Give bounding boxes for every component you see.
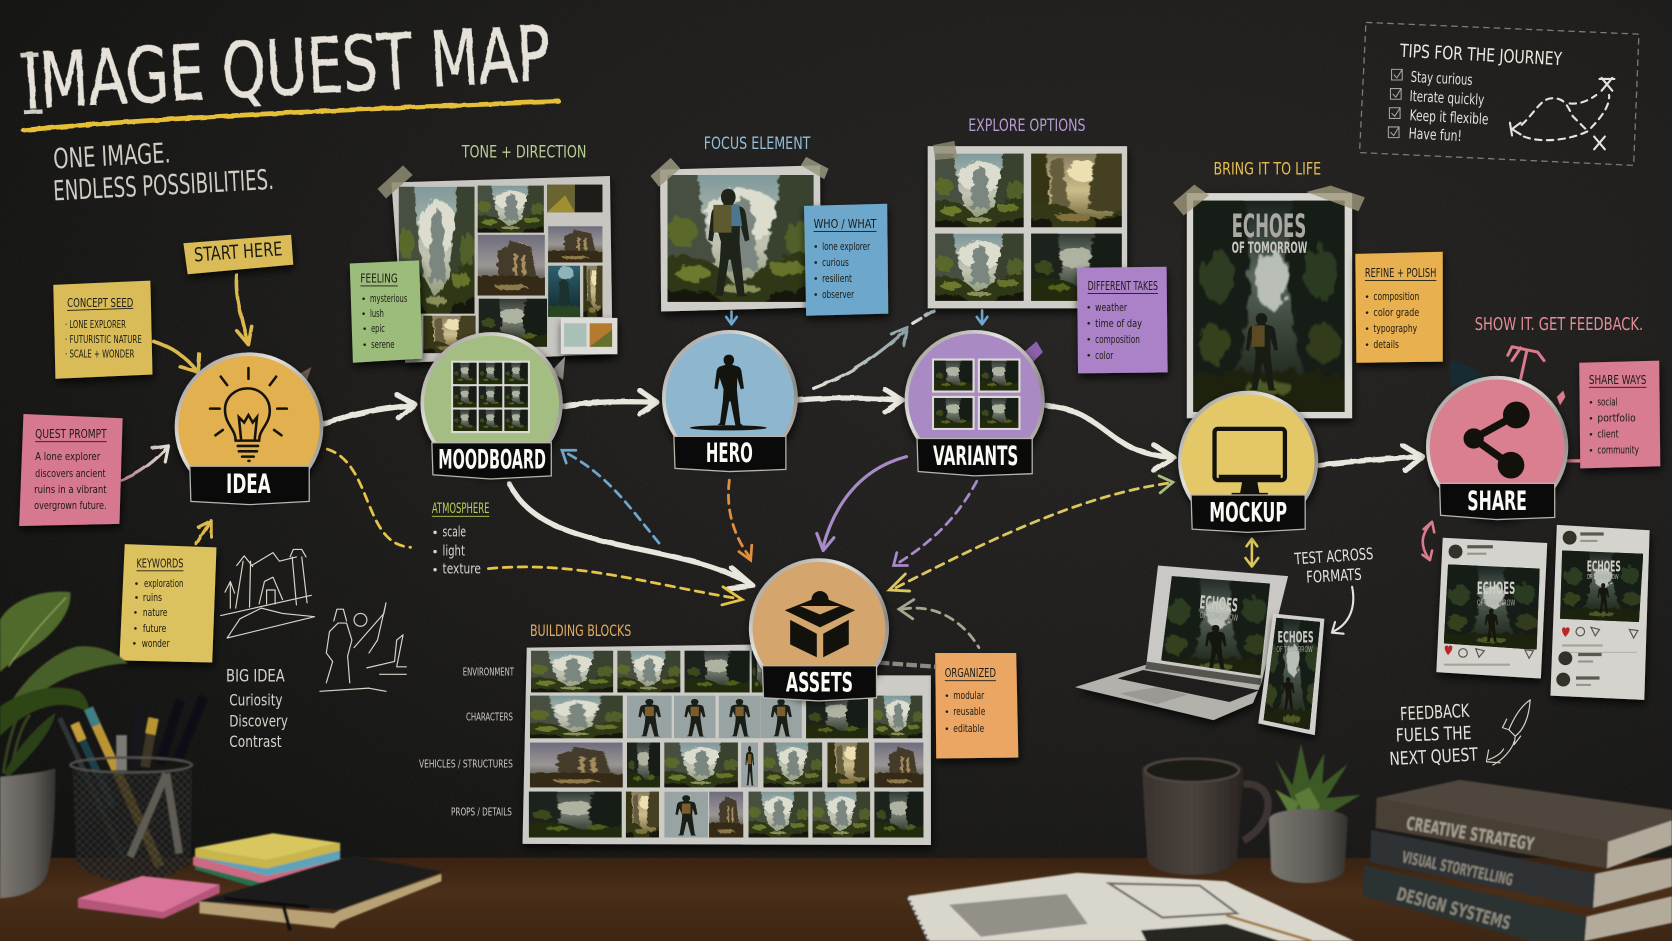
mini variant grid [930, 358, 1022, 431]
arrow: idea to atmosphere [327, 449, 411, 547]
sketch: chalk explorer [320, 603, 406, 691]
social post card 2 [1550, 525, 1652, 700]
tips heading: TIPS FOR THE JOURNEY [1399, 41, 1563, 70]
note: concept seed: · LONE EXPLORER [65, 318, 126, 331]
book: visual storytelling: VISUAL STORYTELLING [1400, 847, 1515, 890]
post image: ECHOES [1477, 579, 1515, 599]
row: props and details [520, 787, 928, 842]
subtitle [52, 136, 275, 207]
row labels: CHARACTERS [466, 710, 513, 723]
subtitle: ENDLESS POSSIBILITIES. [52, 163, 275, 207]
post image: ECHOES [1587, 558, 1621, 576]
test across formats chalk note: TEST ACROSS [1293, 544, 1374, 569]
node: mockup [1180, 393, 1316, 532]
feedback chalk note: NEXT QUEST [1389, 744, 1479, 770]
icon: share symbol [1464, 402, 1529, 478]
node: moodboard [422, 334, 565, 479]
arrow: assets to mockup [889, 476, 1173, 591]
note: organized: modular [953, 689, 984, 702]
tips checklist: Keep it flexible [1409, 106, 1489, 128]
note: who / what: lone explorer [822, 240, 870, 253]
big idea chalk note [226, 666, 288, 751]
note: keywords: future [143, 622, 166, 635]
atmosphere list: texture [443, 562, 481, 578]
wooden desk surface [0, 858, 1672, 941]
post image [1560, 550, 1644, 622]
poster title: OF TOMORROW [1232, 238, 1307, 257]
note: refine + polish: REFINE + POLISH [1365, 266, 1436, 280]
note: keywords [119, 544, 216, 663]
atmosphere list: ATMOSPHERE [432, 501, 490, 517]
note: quest prompt: A lone explorer [35, 450, 100, 463]
laptop screen: ECHOES [1199, 592, 1239, 617]
mug [1142, 757, 1268, 875]
arrow: hero to variants sheet [814, 310, 934, 388]
note: organized: ORGANIZED [945, 666, 996, 680]
stacked books [1363, 780, 1672, 941]
note: keywords: wonder [142, 637, 170, 650]
post image: OF TOMORROW [1587, 573, 1619, 581]
note: concept seed: · SCALE + WONDER [65, 348, 135, 361]
title: IMAGE QUEST MAP [21, 10, 553, 128]
arrow: mockup to devices [1245, 539, 1258, 567]
row labels: PROPS / DETAILS [451, 805, 512, 818]
tape [377, 165, 413, 198]
arrow: concept seed to idea [154, 341, 199, 372]
note: share ways [1579, 361, 1660, 468]
note: refine + polish: typography [1373, 322, 1417, 335]
note: feeling: mysterious [370, 292, 407, 305]
arrow: hero to assets [728, 480, 752, 560]
building blocks heading: BUILDING BLOCKS [530, 621, 631, 640]
row: environment [523, 647, 769, 697]
node: variants [906, 332, 1043, 476]
label: MOCKUP [1209, 498, 1287, 529]
label: VARIANTS [933, 441, 1018, 472]
tips checklist [1388, 68, 1489, 145]
connector: organized to label [879, 663, 936, 667]
colour swatch card [561, 318, 617, 354]
social post card 1 [1434, 538, 1549, 679]
panel: poster mockup [1173, 179, 1365, 433]
feedback chalk note: FUELS THE [1395, 723, 1472, 747]
swatches [547, 185, 602, 212]
label [432, 443, 551, 479]
note: share ways: SHARE WAYS [1589, 373, 1646, 387]
label [1440, 483, 1555, 520]
icon: hero silhouette [690, 355, 767, 430]
book: design systems [1363, 865, 1672, 941]
icon: light bulb [210, 368, 287, 461]
mini image grid [451, 361, 530, 433]
note: share ways: portfolio [1597, 412, 1636, 425]
book: visual storytelling [1370, 830, 1672, 908]
feedback chalk note: FEEDBACK [1400, 701, 1471, 725]
arrow: start here to idea [236, 275, 252, 345]
note: organized: editable [953, 722, 984, 735]
arrow: variants to assets solid [817, 457, 906, 551]
arrow: test across formats [1332, 587, 1353, 634]
succulent in pot [1269, 744, 1361, 883]
moodboard section heading: TONE + DIRECTION [461, 143, 586, 163]
label [917, 438, 1032, 476]
note: quest prompt: discovers ancient [35, 467, 106, 480]
icon: box [785, 591, 855, 657]
arrow: mockup to share [1319, 446, 1422, 470]
arrow: keywords to idea [196, 521, 211, 544]
book: creative strategy [1376, 780, 1672, 868]
poster title [1232, 207, 1307, 257]
tips checklist: Have fun! [1408, 124, 1462, 145]
note: concept seed: CONCEPT SEED [67, 296, 133, 310]
note: different takes: composition [1095, 333, 1140, 346]
open sketchbook [906, 873, 1354, 941]
atmosphere list: scale [443, 524, 466, 540]
icon: chalk rocket [1486, 700, 1530, 765]
note: quest prompt: QUEST PROMPT [35, 427, 107, 441]
panel: variants contact sheet [926, 141, 1131, 308]
big idea chalk note: Discovery [229, 712, 288, 731]
note: keywords: ruins [143, 591, 162, 604]
big idea chalk note: Curiosity [229, 690, 283, 709]
big idea chalk note: BIG IDEA [226, 666, 285, 686]
row labels: ENVIRONMENT [463, 666, 514, 679]
note: different takes: weather [1095, 301, 1127, 314]
title underline [23, 101, 559, 130]
row: characters [521, 691, 927, 743]
note: organized [935, 653, 1018, 759]
phone screen [1264, 618, 1320, 730]
big idea chalk note: Contrast [229, 732, 282, 751]
label: IDEA [226, 469, 271, 500]
label: ASSETS [786, 667, 853, 698]
arrow: hero to variants [799, 389, 902, 412]
note: share ways: social [1597, 396, 1618, 409]
pen cup with pens [60, 697, 204, 882]
note: keywords: exploration [144, 577, 183, 590]
note: quest prompt: overgrown future. [34, 499, 107, 512]
note: concept seed: · FUTURISTIC NATURE [65, 333, 142, 346]
laptop screen: OF TOMORROW [1199, 611, 1239, 624]
arrow: moodboard to assets [510, 484, 753, 589]
label: HERO [706, 438, 753, 469]
label [190, 466, 309, 505]
note: feeling [350, 260, 422, 363]
hero figure [708, 189, 749, 297]
note: feeling: epic [371, 322, 385, 335]
book: creative strategy: CREATIVE STRATEGY [1405, 813, 1536, 856]
arrow: variants sheet to node [977, 310, 987, 324]
hero section heading: FOCUS ELEMENT [704, 134, 811, 154]
sticky note stack [193, 833, 340, 888]
icon: treasure map route [1510, 78, 1614, 149]
note: keywords: nature [143, 606, 167, 619]
note: different takes: time of day [1095, 317, 1142, 330]
node: idea [176, 354, 321, 505]
arrow: texture to assets [488, 567, 742, 605]
note: who / what: observer [822, 288, 854, 301]
arrow: organized to assets [899, 600, 979, 648]
note: different takes: DIFFERENT TAKES [1088, 279, 1158, 293]
tips checklist: Iterate quickly [1409, 87, 1485, 109]
note: who / what: WHO / WHAT [814, 217, 877, 231]
callout: start here [183, 235, 293, 274]
label: MOODBOARD [438, 444, 546, 475]
arrow: variants to assets dashed [894, 481, 977, 565]
note: share ways: client [1597, 428, 1619, 441]
notebook [199, 856, 443, 930]
plant pot [0, 768, 55, 898]
test across formats chalk note: FORMATS [1306, 565, 1362, 587]
callout: start here: START HERE [193, 237, 283, 266]
poster title: ECHOES [1232, 207, 1306, 245]
atmosphere list [432, 501, 490, 578]
note: different takes [1077, 267, 1168, 373]
node: assets [751, 560, 887, 701]
arrow: share to social posts [1422, 522, 1434, 560]
note: refine + polish: color grade [1373, 306, 1419, 319]
pink sticky pad [78, 876, 220, 919]
icon: monitor [1215, 429, 1285, 497]
arrow: assets to moodboard [562, 450, 659, 543]
label: SHARE [1467, 486, 1527, 517]
note: quest prompt [19, 414, 123, 526]
note: share ways: community [1597, 444, 1639, 457]
arrow: variants to mockup [1046, 405, 1174, 470]
post image [1444, 564, 1540, 650]
feedback chalk note [1389, 701, 1479, 770]
arrow: hero photo to node [726, 312, 737, 324]
row labels: VEHICLES / STRUCTURES [419, 757, 513, 770]
node: share [1428, 361, 1580, 520]
node: hero [664, 332, 796, 472]
device: laptop [1075, 564, 1288, 720]
note: who / what: resilient [822, 272, 852, 285]
note: quest prompt: ruins in a vibrant [34, 483, 107, 496]
arrow: share outward [1508, 347, 1544, 384]
panel: moodboard collage [377, 165, 617, 363]
atmosphere list: light [443, 544, 465, 560]
note: who / what [804, 204, 888, 316]
row labels [419, 666, 514, 818]
note: different takes: color [1095, 349, 1113, 362]
phone screen: OF TOMORROW [1276, 645, 1313, 654]
tape [1173, 185, 1365, 216]
panel: hero photo [650, 157, 829, 315]
poster figure [1246, 313, 1278, 391]
note: refine + polish [1355, 252, 1443, 363]
laptop screen [1161, 576, 1270, 676]
mockup section heading: BRING IT TO LIFE [1213, 160, 1321, 180]
arrow: quest prompt to idea [122, 446, 168, 480]
note: feeling: FEELING [360, 271, 398, 285]
device: phone [1257, 605, 1327, 743]
note: organized: reusable [953, 705, 985, 718]
tape [650, 157, 829, 187]
variants section heading: EXPLORE OPTIONS [968, 116, 1086, 136]
phone screen: ECHOES [1277, 627, 1314, 646]
panel: tips for the journey [1360, 22, 1639, 165]
arrow: moodboard to hero [562, 390, 657, 414]
tips checklist: Stay curious [1410, 68, 1473, 89]
label [762, 666, 877, 701]
note: who / what: curious [822, 256, 849, 269]
note: feeling: lush [370, 307, 384, 320]
test across formats chalk note [1293, 544, 1374, 587]
note: refine + polish: details [1373, 338, 1399, 351]
plant [0, 592, 128, 777]
arrow: idea to moodboard [323, 395, 415, 424]
post image: OF TOMORROW [1477, 598, 1515, 607]
note: concept seed [53, 281, 152, 379]
row: vehicles and structures [521, 738, 928, 792]
subtitle: ONE IMAGE. [52, 136, 171, 175]
panel: building blocks sheet [419, 621, 931, 845]
note: feeling: serene [371, 338, 395, 351]
note: keywords: KEYWORDS [136, 556, 183, 570]
note: refine + polish: composition [1373, 290, 1419, 303]
sketch: chalk ruins [221, 549, 315, 638]
